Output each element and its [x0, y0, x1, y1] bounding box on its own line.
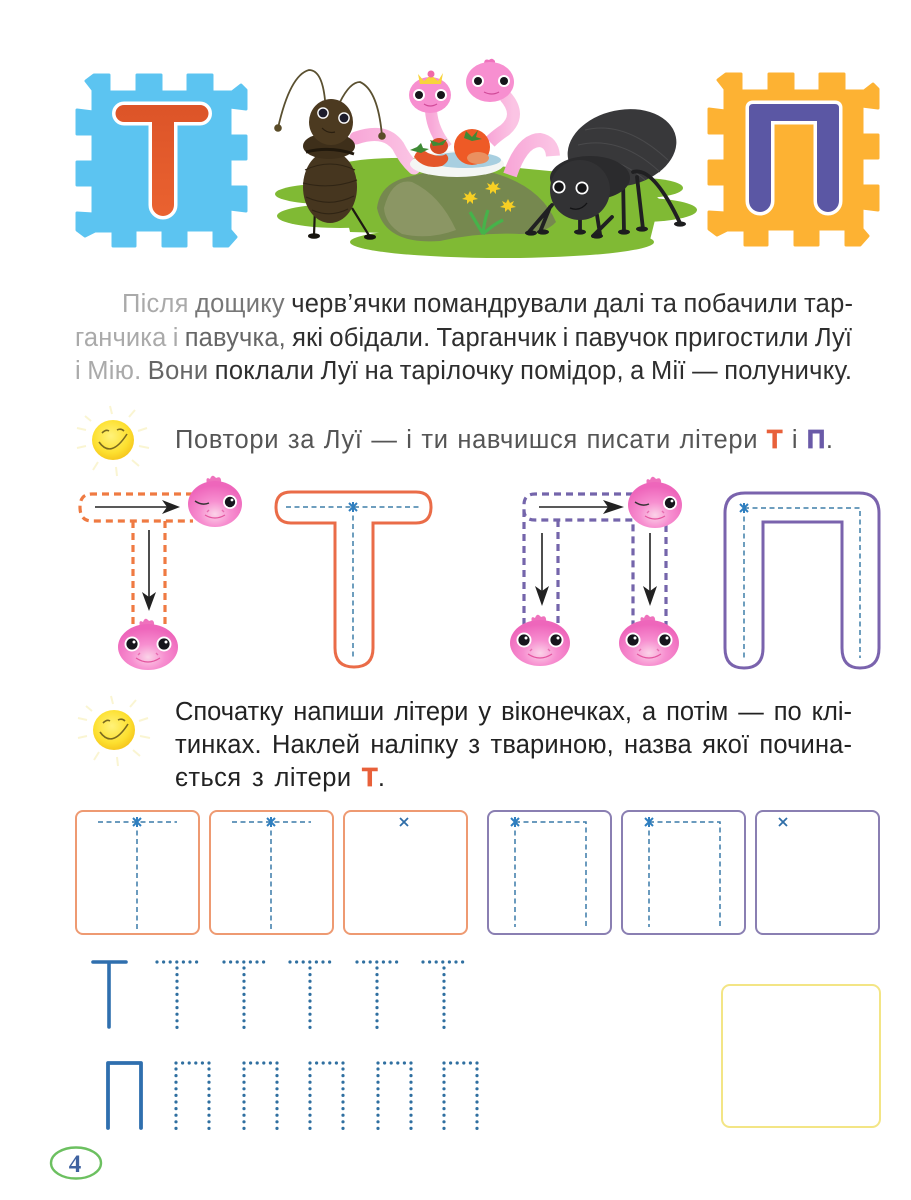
illustration: insects and worms at lunch	[274, 59, 697, 258]
puzzle tile: letter Т	[77, 75, 246, 246]
page number	[51, 1148, 101, 1178]
letter row: Т	[93, 962, 464, 1028]
instruction 2: тинках. Наклей наліпку з твариною, назва якої почина-	[175, 731, 852, 759]
sticker box	[722, 985, 880, 1127]
instruction 2: Спочатку напиши літери у віконечках, а потім — по клі-	[175, 698, 852, 726]
icon: sun 1	[77, 406, 149, 476]
page number: 4	[69, 1151, 82, 1178]
solid outline letter П with guide	[725, 493, 879, 668]
arrow: down left	[535, 533, 549, 606]
story paragraph: ганчика і павучка, які обідали. Тарганчик і павучок пригостили Луї	[75, 324, 852, 352]
story paragraph: Після дощику черв’ячки помандрували далі та побачили тар-	[122, 290, 853, 318]
arrow: right	[95, 500, 180, 514]
cockroach	[274, 70, 386, 240]
puzzle tile: letter П	[709, 74, 878, 245]
spider	[525, 99, 686, 239]
letter row: П	[108, 1063, 477, 1129]
rock	[377, 169, 556, 241]
left worm	[356, 70, 451, 168]
icon: sun 2	[78, 696, 150, 766]
arrow: down	[142, 530, 156, 611]
right worm	[466, 59, 553, 175]
flowers	[462, 181, 516, 234]
story paragraph: і Мію. Вони поклали Луї на тарілочку помідор, а Мії — полуничку.	[75, 357, 852, 385]
writing boxes: П	[488, 811, 879, 934]
instruction 1: Повтори за Луї — і ти навчишся писати літери Т і П.	[175, 426, 833, 454]
instruction 2: ється з літери Т.	[175, 764, 385, 792]
solid outline letter Т with guide	[276, 492, 431, 667]
arrow: down right	[643, 533, 657, 606]
arrow: right	[539, 500, 624, 514]
grass	[275, 158, 697, 258]
plate with tomato and strawberries	[410, 129, 504, 177]
story paragraph	[75, 290, 853, 385]
writing boxes: Т	[76, 811, 467, 934]
tracing demo: Т with dashed outline and arrows	[80, 476, 242, 670]
instruction 2	[175, 698, 852, 792]
tracing demo: П with dashed outline and arrows	[510, 477, 682, 666]
